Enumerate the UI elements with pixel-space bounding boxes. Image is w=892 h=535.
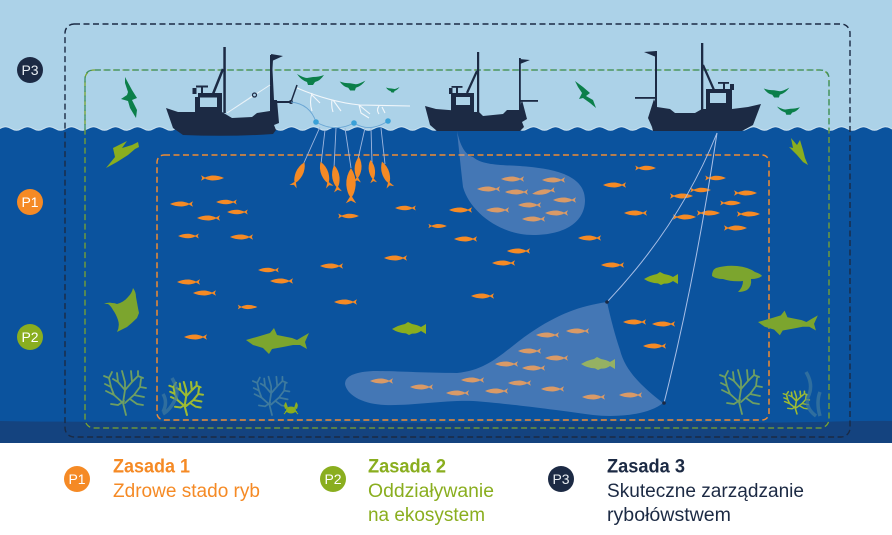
crab — [284, 402, 298, 414]
dashed frame: P2 upper darker segment — [85, 70, 829, 130]
legend: principle 3: Skuteczne zarządzanie — [607, 481, 804, 502]
badge P1: P1 — [21, 194, 39, 210]
shark left — [246, 328, 309, 354]
green fish — [392, 272, 678, 370]
birds — [121, 74, 800, 118]
badge P3 — [17, 57, 43, 83]
legend: principle 3: Zasada 3 — [607, 456, 685, 478]
sea bird diving, left — [106, 141, 139, 168]
background: wave highlight — [0, 126, 892, 138]
dashed frame: P3 — [65, 24, 850, 437]
badge P2: P2 — [21, 329, 39, 345]
legend: principle 2: Zasada 2 — [368, 456, 446, 478]
boat 3 — [635, 43, 761, 131]
background: ocean — [0, 132, 892, 443]
legend: principle 3: rybołówstwem — [607, 505, 731, 526]
legend: principle 2: P2 — [324, 471, 342, 487]
legend: principle 1: Zasada 1 — [113, 456, 190, 478]
net: purse seine — [457, 131, 585, 235]
badge P2 — [17, 324, 43, 350]
background: sky — [0, 0, 892, 132]
boat 1 with longline — [166, 47, 297, 136]
manta ray — [104, 288, 139, 332]
badge P3: P3 — [21, 62, 39, 78]
legend: principle 1 — [64, 456, 260, 502]
dashed frame: P1 — [157, 155, 769, 420]
dashed frame: P2 — [85, 70, 829, 428]
longline with hooks and fish — [289, 88, 410, 203]
legend: principle 2: na ekosystem — [368, 505, 485, 526]
background: ocean waves — [0, 127, 892, 139]
trawl cables — [605, 133, 717, 405]
legend panel — [0, 443, 892, 535]
sea bird diving, right — [789, 138, 808, 165]
legend: principle 2 — [320, 456, 494, 526]
legend: principle 3 — [548, 456, 804, 526]
legend: principle 2: Oddziaływanie — [368, 481, 494, 502]
sea turtle — [712, 266, 762, 292]
boat 2 — [425, 52, 538, 131]
net: trawl — [345, 302, 663, 416]
legend: principle 1: P1 — [68, 471, 86, 487]
badge P1 — [17, 189, 43, 215]
legend: principle 1: Zdrowe stado ryb — [113, 481, 260, 502]
corals — [104, 370, 820, 416]
shark right — [758, 311, 818, 335]
background: seabed — [0, 421, 892, 443]
school of free-swimming fish — [170, 165, 760, 400]
legend: principle 3: P3 — [552, 471, 570, 487]
